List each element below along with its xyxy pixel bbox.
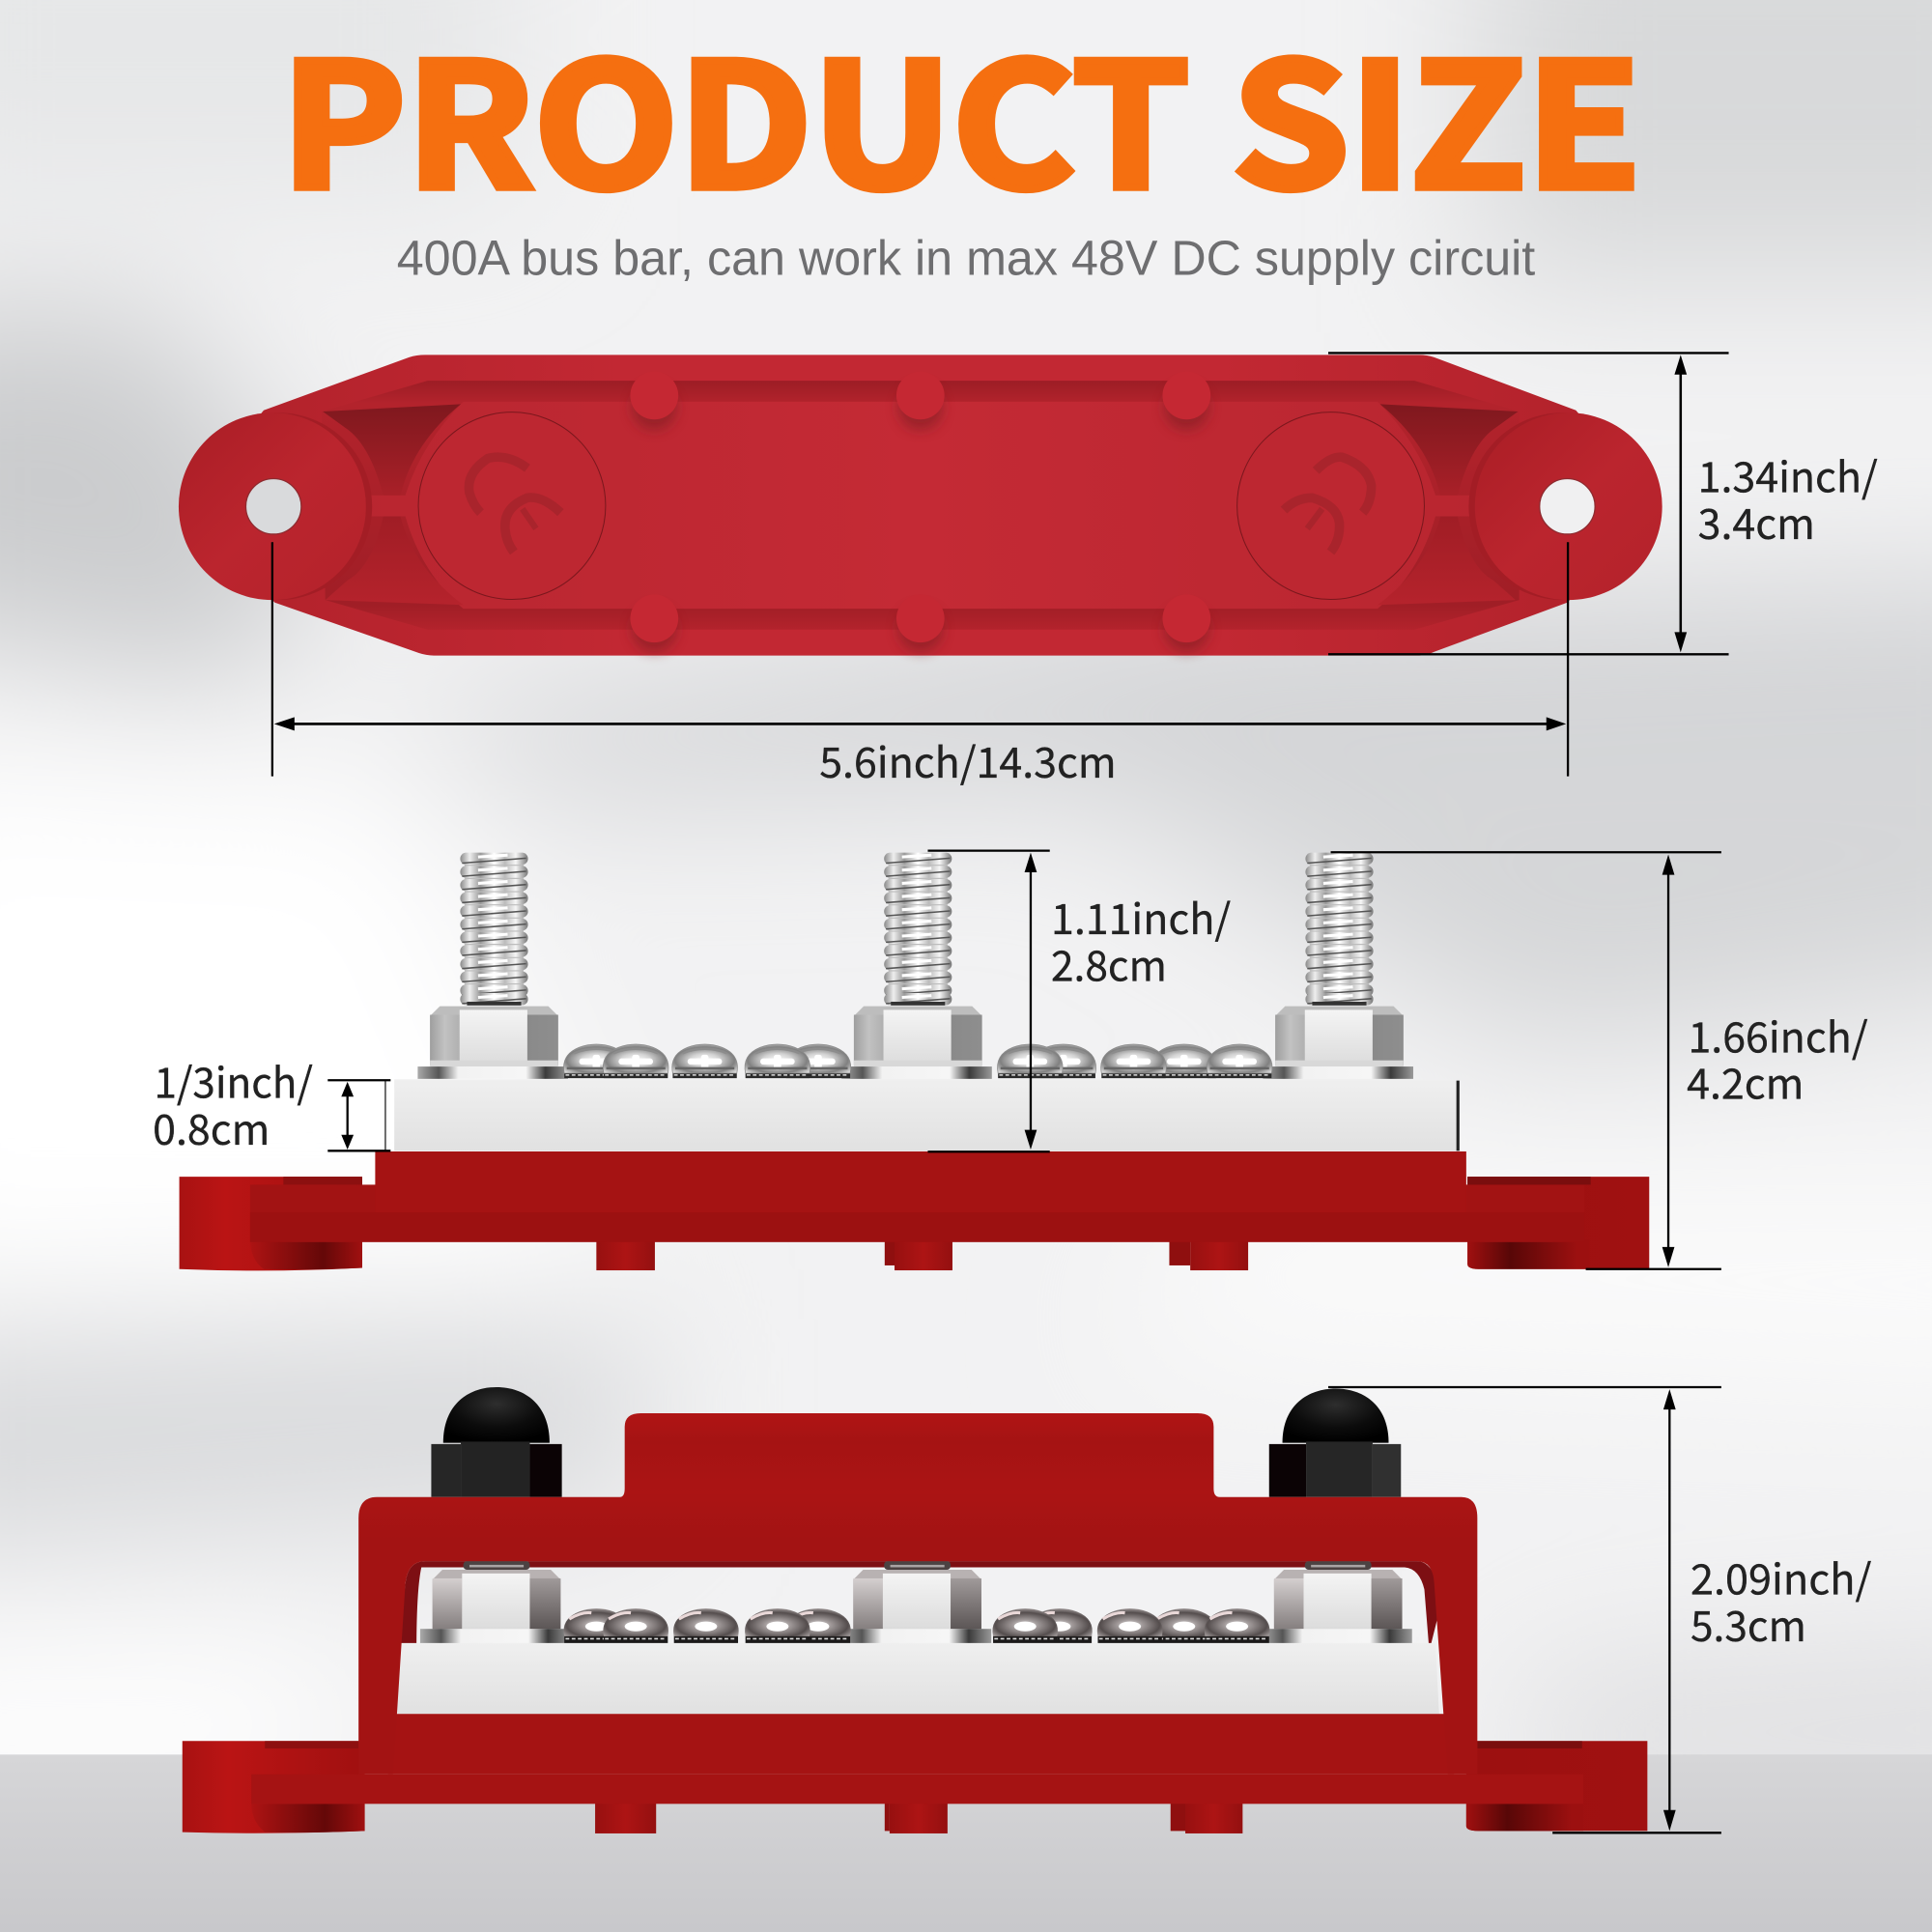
center plate (357, 402, 1479, 609)
dimension: 2.09inch overall height: 2.09inch/ (1690, 1548, 1872, 1607)
left terminal washer (179, 412, 372, 600)
threaded stud right (1305, 853, 1374, 1006)
bottom row pegs (630, 594, 1210, 642)
red base (180, 1151, 1649, 1270)
cover inner shadow edges (398, 1561, 1441, 1651)
small screws row covered (564, 1608, 1269, 1644)
dimension: 1/3inch block height: 0.8cm (153, 1097, 270, 1157)
base flange (251, 1775, 1583, 1804)
dimension: 1.34inch height (1328, 353, 1878, 654)
hex nut left covered (420, 1561, 571, 1644)
cover outer body (185, 355, 1658, 656)
dimension: 1.34inch height: 1.34inch/ (1698, 445, 1878, 505)
dimension: 5.6inch width (272, 542, 1568, 790)
dimension: 1/3inch block height (153, 1050, 390, 1157)
hex nut right (1263, 1007, 1413, 1079)
peg shadows (632, 385, 1208, 652)
dimension: 1.34inch height: 3.4cm (1698, 492, 1815, 552)
floor (0, 1754, 1932, 1932)
dimension: 1.11inch stud height (927, 851, 1231, 1151)
dimension: 1.11inch stud height: 2.8cm (1051, 933, 1167, 993)
dimension: 1.66inch total height: 1.66inch/ (1688, 1005, 1868, 1065)
panel: top view of bus bar cover (179, 355, 1662, 656)
right cap with CE mark (1237, 412, 1424, 600)
hex nut left (417, 1007, 568, 1079)
aluminum block (384, 1079, 1460, 1151)
top row pegs (630, 372, 1210, 419)
pegs and terminal lugs (183, 1741, 1647, 1833)
hex nut middle (841, 1007, 992, 1079)
dimension: 1.11inch stud height: 1.11inch/ (1051, 887, 1231, 947)
panel: side view with exposed studs (180, 853, 1649, 1270)
left end windows (323, 404, 464, 605)
dimension: 1.66inch total height (1331, 852, 1868, 1269)
dimension: 1.66inch total height: 4.2cm (1687, 1052, 1804, 1112)
threaded stud left (460, 853, 528, 1006)
black cap left (431, 1387, 562, 1497)
dimension: 1/3inch block height: 1/3inch/ (154, 1050, 313, 1110)
recessed channel (322, 381, 1520, 630)
right end windows (1378, 404, 1518, 605)
left cap with CE mark (418, 412, 606, 600)
panel: side view with cover fitted (183, 1387, 1647, 1833)
hex nut middle covered (841, 1561, 991, 1644)
dimension: 2.09inch overall height (1328, 1387, 1872, 1833)
threaded stud middle (884, 853, 952, 1006)
aluminum block covered (397, 1643, 1439, 1714)
black cap right (1269, 1389, 1401, 1497)
hex nut right covered (1262, 1561, 1412, 1644)
dimension: 2.09inch overall height: 5.3cm (1690, 1594, 1806, 1654)
red cover (358, 1413, 1477, 1775)
base body (388, 1714, 1454, 1775)
right terminal washer (1468, 412, 1662, 600)
dimension: 5.6inch width: 5.6inch/14.3cm (819, 730, 1117, 790)
subtitle: 400A bus bar, can work in max 48V DC supply circuit (397, 230, 1535, 285)
small screws row (564, 1044, 1272, 1078)
